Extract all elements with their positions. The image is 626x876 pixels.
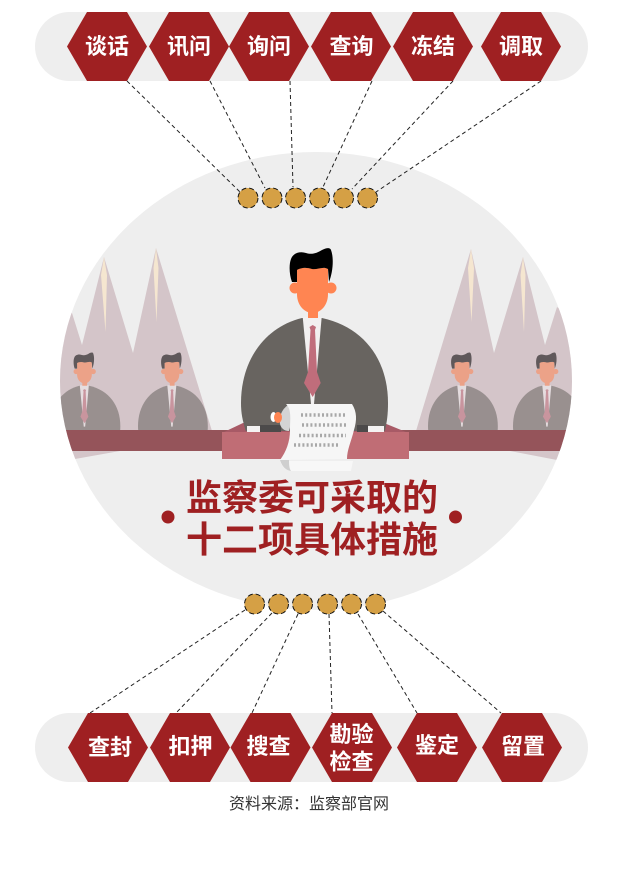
title: 监察委可采取的 [186, 477, 438, 518]
hexagon: 鉴定 [397, 713, 477, 782]
hexagon: 讯问: 讯问 [167, 34, 211, 59]
hexagon: 冻结: 冻结 [411, 34, 455, 59]
hexagon: 查询: 查询 [329, 34, 374, 59]
table bar [40, 430, 590, 451]
person: left 1 [60, 352, 120, 431]
bottom gold dots [244, 594, 386, 614]
bottom hexagon row [68, 713, 562, 782]
right mountains [416, 250, 572, 460]
panel: bottom measures strip [35, 713, 588, 782]
person: central figure [241, 248, 388, 435]
table front [222, 432, 409, 459]
title bullet: right [449, 510, 462, 524]
hexagon: 询问 [229, 12, 309, 81]
hexagon: 冻结 [393, 12, 473, 81]
person: left 2 [138, 352, 208, 430]
hexagon: 搜查: 搜查 [246, 734, 291, 759]
panel: top measures strip [35, 12, 588, 81]
hexagon: 谈话: 谈话 [85, 34, 129, 59]
left mountains [60, 248, 212, 459]
title: 十二项具体措施 [186, 519, 438, 560]
hexagon: 调取: 调取 [499, 34, 543, 59]
hexagon: 询问: 询问 [247, 34, 291, 59]
top hexagon row [67, 12, 561, 81]
hexagon: 勘验检查 [312, 713, 392, 782]
table top [224, 423, 406, 432]
hexagon: 谈话 [67, 12, 147, 81]
connector lines: bottom [90, 610, 501, 713]
hexagon: 调取 [481, 12, 561, 81]
top gold dots [238, 188, 378, 208]
title bullet: left [162, 510, 174, 524]
connector lines: top [127, 81, 541, 192]
hexagon: 扣押 [150, 713, 230, 782]
sleeves [247, 425, 384, 432]
illustration: panel scene [40, 248, 590, 462]
source note: 资料来源：监察部官网 [229, 795, 389, 813]
person: right 2 [513, 352, 572, 431]
hexagon: 勘验检查: 勘验 [329, 722, 374, 747]
hexagon: 留置: 留置 [501, 734, 545, 759]
panel members [60, 352, 572, 431]
hexagon: 搜查 [230, 713, 310, 782]
person: right 1 [428, 352, 498, 430]
hexagon: 留置 [482, 713, 562, 782]
central oval panel [60, 152, 572, 610]
hexagon: 查询 [311, 12, 391, 81]
hexagon: 讯问 [149, 12, 229, 81]
hexagon: 查封: 查封 [88, 735, 132, 760]
hexagon: 扣押: 扣押 [168, 734, 213, 759]
hexagon: 查封 [68, 713, 148, 782]
main speaker at table [222, 248, 409, 471]
hexagon: 鉴定: 鉴定 [415, 733, 459, 758]
title [186, 477, 438, 560]
hexagon: 勘验检查: 检查 [329, 750, 374, 774]
scroll document [270, 404, 356, 471]
